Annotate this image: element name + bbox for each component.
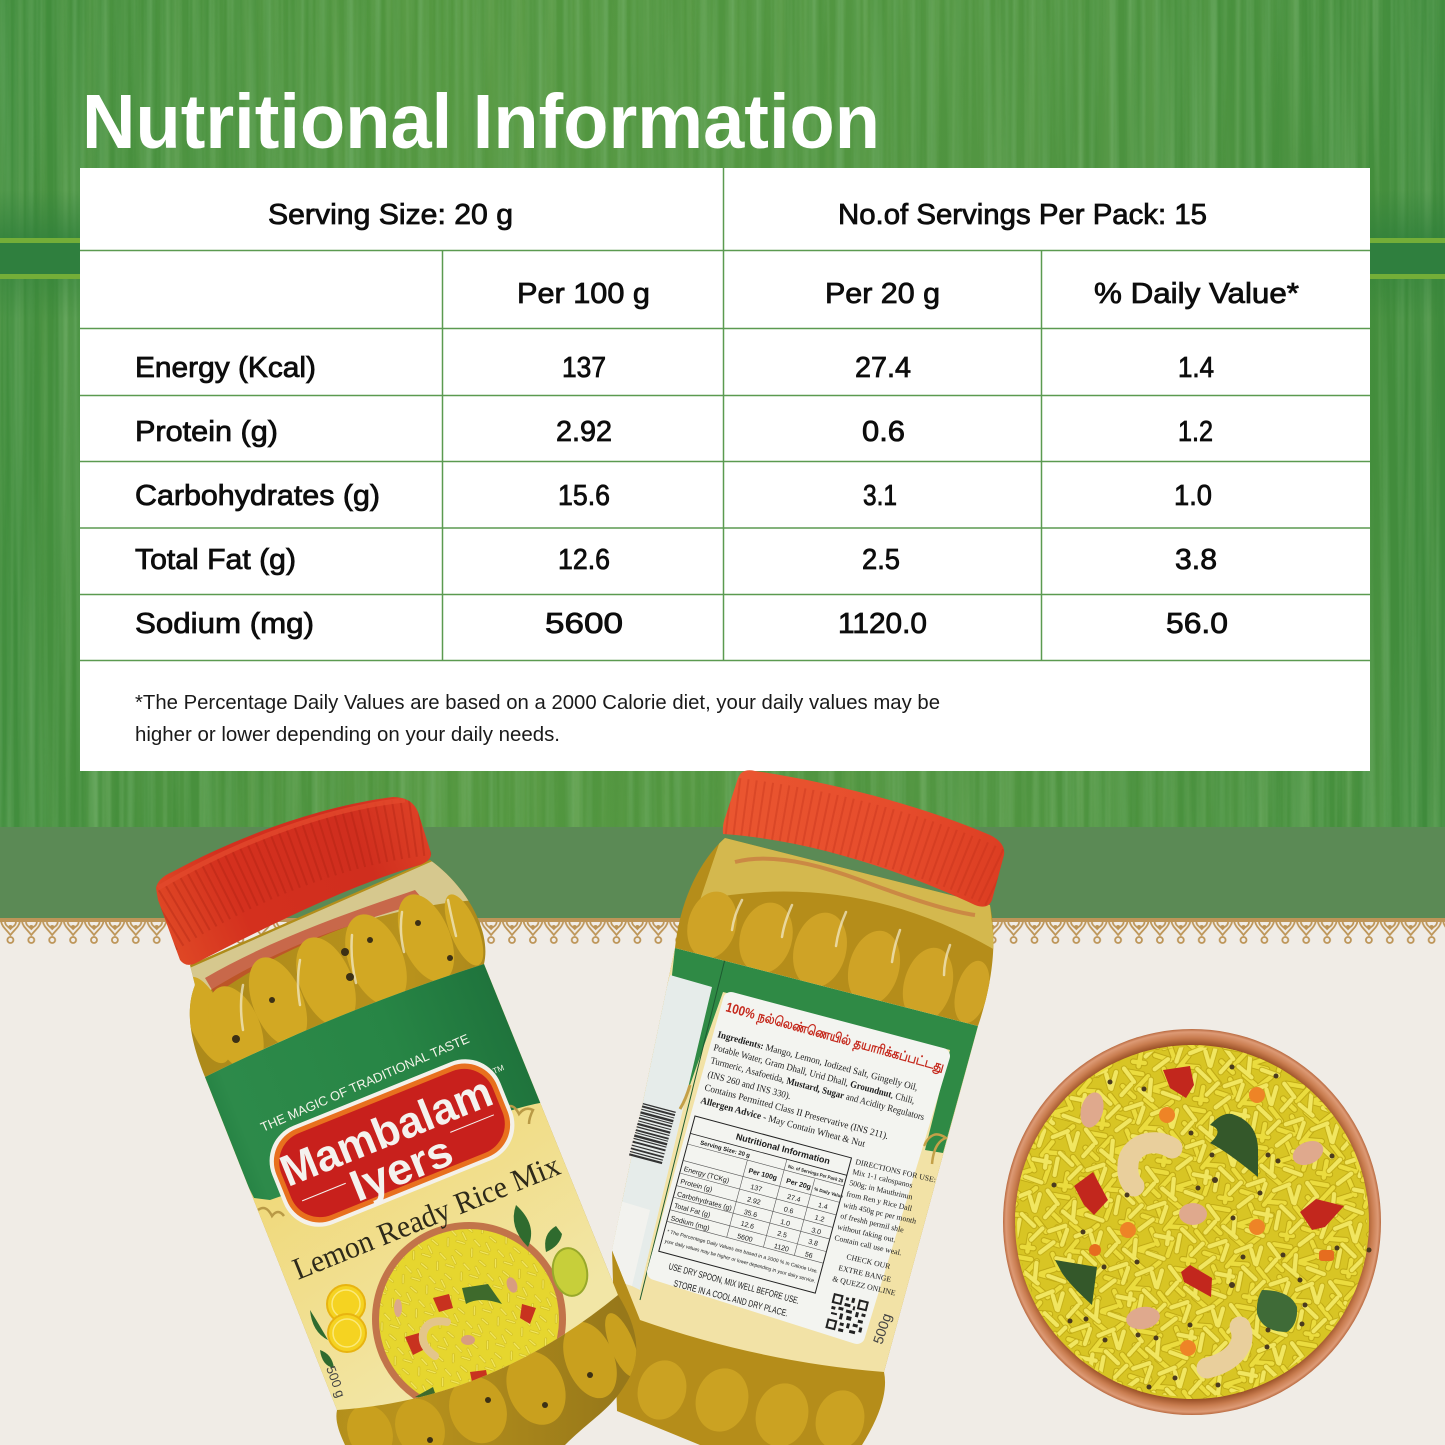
mini nutrition table on jar: Carbohydrates (g) (676, 1191, 732, 1213)
table header: columns: % Daily Value* (1094, 278, 1299, 310)
peanuts (1077, 1090, 1327, 1332)
rice (1015, 1045, 1369, 1399)
table header: serving info: Serving Size: 20 g (268, 199, 513, 231)
mini nutrition table on jar: Energy (TCKg) (683, 1166, 730, 1185)
white info panel (655, 1000, 942, 1336)
mustard seeds (1052, 1064, 1372, 1390)
row: total fat: 12.6 (558, 544, 610, 576)
directions text: with 450g pc per month (843, 1200, 917, 1226)
back label (612, 948, 978, 1372)
row: energy: Energy (Kcal) (135, 352, 316, 384)
row: protein: 2.92 (556, 416, 612, 448)
row: carbohydrates: 3.1 (863, 480, 897, 512)
mini nutrition table on jar: Per 100g (748, 1168, 778, 1182)
carrot pieces (1089, 1087, 1334, 1356)
directions text: of freshh permil shle (840, 1211, 905, 1235)
row: energy: 1.4 (1178, 352, 1214, 384)
weight: 500 g (323, 1364, 348, 1400)
mini nutrition table on jar: 35.6 (743, 1209, 758, 1219)
row: total fat: 3.8 (1175, 544, 1217, 576)
title: Nutritional Information (82, 79, 880, 165)
copper rim (1003, 1029, 1381, 1415)
table header: columns: Per 20 g (825, 278, 940, 310)
directions text: EXTRE BANGE (838, 1263, 892, 1284)
row: protein: Protein (g) (135, 416, 278, 448)
mini nutrition table on jar: % Daily Value (814, 1186, 844, 1199)
ingredients text: Contains Permitted Class II Preservative (INS 211). (703, 1082, 890, 1142)
mini nutrition table on jar: 3.8 (807, 1239, 819, 1248)
ingredients text: Turmeric, Asafoetida, Mustard, Sugar and Acidity Regulators (709, 1055, 926, 1123)
lemon slices (327, 1245, 591, 1352)
mini nutrition table on jar: Total Fat (g) (673, 1203, 711, 1219)
red chilies (1074, 1066, 1344, 1297)
lemon rice bowl (1003, 1029, 1381, 1415)
directions text (832, 1157, 937, 1298)
mini nutrition table on jar: Sodium (mg) (670, 1215, 710, 1232)
curry leaves (1055, 1114, 1297, 1332)
directions text: CHECK OUR (846, 1252, 892, 1271)
row: sodium: 5600 (545, 608, 623, 640)
green band (0, 827, 1445, 919)
row: protein: 0.6 (862, 416, 905, 448)
decorative lace border (0, 918, 1445, 947)
mini nutrition table on jar: 12.6 (740, 1221, 755, 1231)
panel: nutrition table (80, 168, 1370, 771)
ingredients text: Allergen Advice - May Contain Wheat & Nut (699, 1095, 867, 1150)
cream lower background (0, 919, 1445, 1445)
row: total fat (135, 544, 1217, 576)
mini nutrition table on jar: Per 20g (785, 1178, 812, 1191)
row: sodium: 1120.0 (838, 608, 927, 640)
product name: Lemon Ready Rice Mix (288, 1147, 565, 1286)
jar cap (723, 770, 1004, 907)
ingredients text: Potable Water, Gram Dhall, Urid Dhall, Groundnut, Chili, (712, 1042, 916, 1107)
row: carbohydrates: 1.0 (1174, 480, 1212, 512)
barcode (629, 1103, 676, 1164)
table header: columns (517, 278, 1299, 310)
background: banana leaf texture (0, 0, 1445, 830)
mini nutrition table on jar: 1.4 (817, 1202, 828, 1211)
directions text: from Ren y Rice Dall (846, 1189, 914, 1213)
row: energy: 137 (562, 352, 606, 384)
row: carbohydrates: 15.6 (558, 480, 610, 512)
mini nutrition table on jar: your daily values may be higher or lower depending in your dairy service. (664, 1238, 816, 1285)
mini nutrition table on jar: Serving Size: 20 g (699, 1140, 751, 1160)
cashews (1128, 1143, 1242, 1368)
QR code (825, 1293, 869, 1337)
row: total fat: Total Fat (g) (135, 544, 296, 576)
front jar (156, 797, 650, 1445)
mini nutrition table on jar: 27.4 (786, 1194, 801, 1204)
mini nutrition table on jar: 1120 (773, 1243, 789, 1254)
jar body and filling (173, 850, 650, 1445)
curry leaves on label (310, 1205, 562, 1368)
mini nutrition table on jar: 1.2 (814, 1215, 825, 1224)
mini nutrition table on jar: 0.6 (783, 1206, 794, 1216)
storage instructions: USE DRY SPOON, MIX WELL BEFORE USE. (667, 1261, 800, 1306)
mini nutrition table on jar (659, 1116, 853, 1294)
directions text: Contain call use weal. (834, 1233, 903, 1257)
directions text: Mix 1-1 calospanos (852, 1167, 913, 1190)
brand logo: Mambalam (273, 1067, 499, 1196)
mini nutrition table on jar: Nutritional Information (735, 1132, 831, 1166)
row: total fat: 2.5 (862, 544, 900, 576)
storage instructions (667, 1261, 800, 1318)
directions text: 500g; in Mauthrinun (849, 1178, 914, 1201)
brand logo: Iyers (343, 1126, 460, 1211)
mini nutrition table on jar: 56 (804, 1251, 813, 1260)
row: carbohydrates: Carbohydrates (g) (135, 480, 380, 512)
row: sodium: 56.0 (1166, 608, 1228, 640)
mini nutrition table on jar: 5600 (736, 1233, 753, 1244)
directions text: DIRECTIONS FOR USE: (855, 1157, 937, 1184)
mini nutrition table on jar: No. of Servings Per Pack 25 (787, 1164, 844, 1185)
trademark: TM (491, 1063, 506, 1076)
jar cap (156, 797, 431, 965)
row: energy (135, 352, 1214, 384)
footnote: *The Percentage Daily Values are based on a 2000 Calorie diet, your daily values may be (135, 691, 940, 714)
ingredients text: Ingredients: Mango, Lemon, Iodized Salt, Gingelly Oil, (716, 1029, 919, 1093)
net weight: 500g (870, 1311, 894, 1346)
tamil heading: 100% நல்லெண்ணெயில் தயாரிக்கப்பட்டது (724, 999, 946, 1076)
footnote: higher or lower depending on your daily needs. (135, 723, 560, 746)
ingredients text: (INS 260 and INS 330). (706, 1069, 792, 1102)
bowl on label (372, 1222, 566, 1416)
front label (205, 964, 618, 1410)
directions text: without faking out. (837, 1222, 897, 1244)
mini nutrition table on jar: 2.92 (746, 1196, 761, 1207)
mini nutrition table on jar: 137 (750, 1184, 763, 1194)
table header: columns: Per 100 g (517, 278, 650, 310)
mini nutrition table on jar: 3.0 (810, 1227, 822, 1236)
table header: serving info (268, 199, 1207, 231)
row: sodium: Sodium (mg) (135, 608, 314, 640)
mini nutrition table on jar: * The Percentage Daily Values are based in a 2000 % in Calorie Use. (666, 1229, 819, 1275)
jar body and filling (612, 838, 994, 1445)
row: protein: 1.2 (1178, 416, 1213, 448)
mini nutrition table on jar: 2.5 (776, 1230, 788, 1240)
tagline: THE MAGIC OF TRADITIONAL TASTE (258, 1031, 472, 1135)
footnote (135, 691, 940, 746)
row: sodium (135, 608, 1228, 640)
storage instructions: STORE IN A COOL AND DRY PLACE. (672, 1278, 789, 1318)
row: energy: 27.4 (855, 352, 911, 384)
ingredients text (699, 1029, 926, 1150)
back jar (600, 770, 1020, 1445)
mini nutrition table on jar: Protein (g) (680, 1179, 713, 1194)
directions text: & QUEZZ ONLINE (832, 1274, 897, 1298)
table header: serving info: No.of Servings Per Pack: 15 (838, 199, 1207, 231)
row: protein (135, 416, 1213, 448)
mini nutrition table on jar: 1.0 (780, 1219, 791, 1228)
row: carbohydrates (135, 480, 1212, 512)
